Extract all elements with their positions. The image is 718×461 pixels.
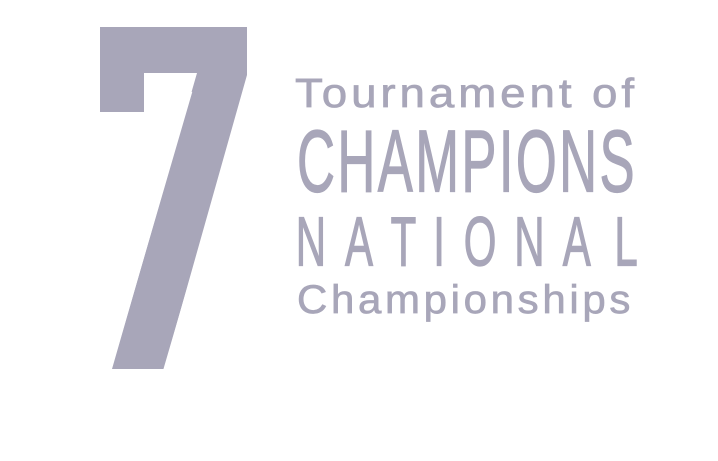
heading: Tournament of: Tournament of — [295, 70, 638, 116]
numeral 7 — [100, 27, 247, 369]
heading: NATIONAL: NATIONAL — [296, 204, 638, 281]
logo: 7 Tournament of Champions National Championships — [100, 27, 637, 369]
heading: National Championships: Championships — [297, 278, 634, 322]
